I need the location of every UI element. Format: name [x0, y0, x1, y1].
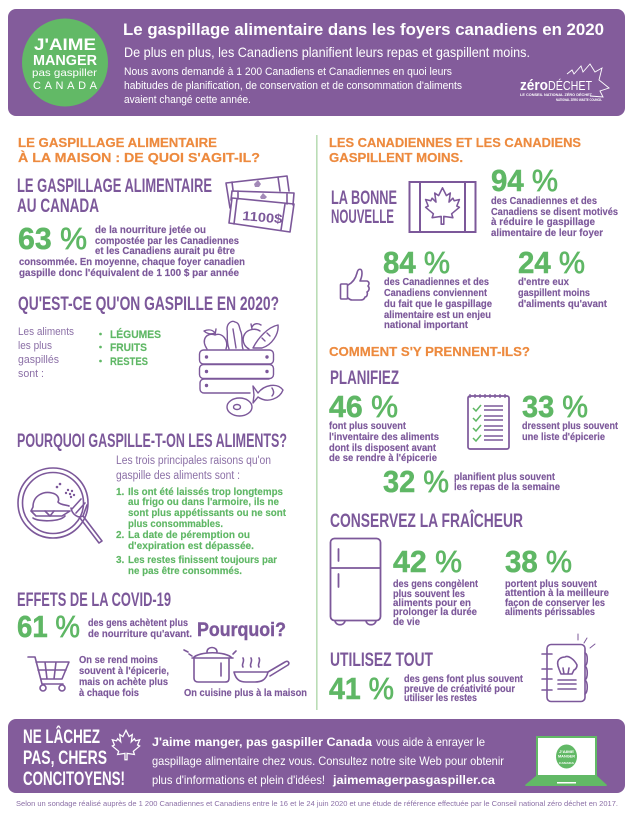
- list: three main reasons: [116, 487, 287, 577]
- stat: 84 %: 84 %: [383, 245, 450, 280]
- logo: zéro déchet: DÉCHET: [548, 78, 592, 93]
- stat: 33 %: [522, 389, 619, 443]
- footer message: vous aide à enrayer le: [376, 735, 485, 749]
- stat: 84 %: national important: [384, 320, 469, 331]
- stat: 84 %: alimentaire est un enjeu: [384, 310, 491, 321]
- stat: 24 %: d'entre eux: [518, 277, 569, 288]
- icon: pot and pan: [184, 648, 289, 682]
- heading: pourquoi gaspille-t-on: POURQUOI GASPILLE-T-ON LES ALIMENTS?: [17, 431, 287, 452]
- stat text: 63 %: [19, 225, 245, 279]
- text: les trois principales raisons: Les trois principales raisons qu'on: [116, 455, 271, 467]
- footer slogan: NE LÂCHEZ: [23, 726, 100, 748]
- icon: banknotes 1 100 $: 1100$: [242, 208, 284, 227]
- icon: laptop with logo: CANADA: [559, 761, 575, 765]
- footer slogan: [23, 726, 125, 790]
- footer message: jaimemagerpasgaspiller.ca: [332, 773, 495, 787]
- left column heading: À LA MAISON : DE QUOI S'AGIT-IL?: [18, 150, 260, 165]
- heading: le gaspillage alimentaire au Canada: AU CANADA: [17, 196, 99, 217]
- text: on se rend moins souvent: On se rend moins: [79, 655, 158, 666]
- logo: J'aime manger pas gaspiller Canada: [22, 18, 108, 106]
- stat text: 63 %: consommée. En moyenne, chaque foyer canadien: [19, 257, 245, 268]
- intro paragraph: avaient changé cette année.: [124, 94, 251, 106]
- heading: qu'est-ce qu'on gaspille: QU'EST-CE QU'ON GASPILLE EN 2020?: [18, 294, 279, 315]
- text: les trois principales raisons: [116, 455, 271, 482]
- heading: la bonne nouvelle: NOUVELLE: [331, 207, 394, 228]
- icon: thumbs up: [340, 269, 369, 300]
- stat: 46 %: dont ils disposent avant: [329, 443, 437, 454]
- subtitle: De plus en plus, les Canadiens planifient leurs repas et gaspillent moins.: [124, 44, 530, 60]
- left column heading: LE GASPILLAGE ALIMENTAIRE: [18, 135, 217, 150]
- logo: zéro déchet: [520, 64, 609, 102]
- heading: la bonne nouvelle: [331, 188, 397, 228]
- stat text: 63 %: de la nourriture jetée ou: [95, 225, 206, 236]
- text: on se rend moins souvent: souvent à l'épicerie,: [79, 666, 169, 677]
- stat: 94 %: alimentaire de leur foyer: [491, 228, 603, 239]
- stat: 63 %: [18, 221, 245, 279]
- heading: planifiez: PLANIFIEZ: [330, 368, 399, 389]
- stat: 84 %: Canadiens conviennent: [384, 288, 488, 299]
- stat: 38 %: façon de conserver les: [505, 598, 605, 609]
- list: légumes fruits restes: FRUITS: [110, 342, 147, 354]
- stat: 41 %: [329, 671, 524, 706]
- heading: utilisez tout: UTILISEZ TOUT: [330, 650, 433, 671]
- stat: 24 %: 24 %: [518, 245, 585, 280]
- text: les aliments les plus gaspillés: gaspillés: [18, 354, 59, 366]
- list: légumes fruits restes: RESTES: [110, 356, 148, 368]
- logo: J'aime manger pas gaspiller Canada: MANGER: [33, 52, 97, 69]
- text: les aliments les plus gaspillés: les plus: [18, 340, 52, 352]
- stat: 46 %: 46 %: [329, 389, 398, 424]
- icon: laptop with logo: MANGER: [558, 754, 575, 758]
- text: les trois principales raisons: gaspille des aliments sont :: [116, 470, 240, 482]
- stat text: 63 %: gaspille donc l'équivalent de 1 100 $ par année: [19, 268, 239, 279]
- stat: 32 %: 32 %: [383, 464, 449, 499]
- right column heading: GASPILLENT MOINS.: [329, 150, 463, 165]
- stat text: 63 %: et les Canadiens aurait pu être: [95, 246, 235, 257]
- heading: effets de la covid-19: EFFETS DE LA COVID-19: [17, 590, 171, 611]
- icon: fridge: [330, 538, 380, 625]
- footer message: J'aime manger, pas gaspiller Canada: [152, 735, 372, 749]
- stat: 32 %: les repas de la semaine: [454, 482, 560, 493]
- footer message: plus d'informations et plein d'idées!: [152, 773, 325, 787]
- icon: shopping cart: [28, 657, 69, 691]
- stat: 32 %: [383, 464, 560, 499]
- list: légumes fruits restes: [99, 328, 161, 368]
- heading: le gaspillage alimentaire au Canada: [17, 176, 212, 217]
- text: on cuisine plus à la maison: On cuisine plus à la maison: [184, 688, 307, 699]
- stat: 84 %: du fait que le gaspillage: [384, 299, 492, 310]
- intro paragraph: Nous avons demandé à 1 200 Canadiens et Canadiennes en quoi leurs: [124, 66, 452, 78]
- text: on se rend moins souvent: [79, 655, 169, 699]
- right column heading: [329, 135, 581, 165]
- footer slogan: PAS, CHERS: [23, 748, 107, 769]
- stat: 46 %: [329, 389, 439, 464]
- stat: 33 %: une liste d'épicerie: [522, 432, 605, 443]
- stat: 46 %: l'inventaire des aliments: [329, 432, 439, 443]
- stat: 41 %: des gens font plus souvent: [404, 674, 524, 685]
- logo: zéro déchet: NATIONAL ZERO WASTE COUNCIL: [556, 98, 602, 102]
- list: three main reasons: plus consommables.: [128, 519, 223, 530]
- stat: 61 %: [17, 609, 192, 644]
- icon: crate of food: [200, 321, 283, 416]
- heading: comment s'y prennent-ils: COMMENT S'Y PRENNENT-ILS?: [329, 344, 530, 359]
- stat: 46 %: font plus souvent: [329, 421, 407, 432]
- stat: 94 %: à réduire le gaspillage: [491, 217, 595, 228]
- stat: 84 %: des Canadiennes et des: [384, 277, 489, 288]
- heading: conservez la fraîcheur: CONSERVEZ LA FRAÎCHEUR: [330, 510, 523, 532]
- list: three main reasons: Les restes finissent toujours par: [128, 555, 277, 566]
- stat: 63 %: 63 %: [18, 221, 87, 256]
- left column heading: [18, 135, 260, 165]
- stat: 33 %: dressent plus souvent: [522, 421, 619, 432]
- stat: 38 %: aliments périssables: [505, 607, 595, 618]
- stat: 42 %: plus souvent les: [393, 589, 465, 600]
- icon: canadian flag: [410, 182, 476, 232]
- list: three main reasons: 1.: [116, 487, 125, 498]
- logo: zéro déchet: LE CONSEIL NATIONAL ZÉRO DÉCHET: [520, 92, 593, 97]
- title: Le gaspillage alimentaire dans les foyers canadiens en 2020: [123, 20, 604, 39]
- header banner: [8, 9, 625, 116]
- stat text: 63 %: compostée par les Canadiennes: [95, 236, 239, 247]
- icon: plate with burger and fork: [18, 468, 102, 543]
- stat: 61 %: des gens achètent plus: [88, 618, 188, 629]
- stat: 42 %: [393, 544, 479, 628]
- right column heading: LES CANADIENNES ET LES CANADIENS: [329, 135, 581, 150]
- list: three main reasons: d'expiration est dépassée.: [128, 541, 254, 552]
- list: légumes fruits restes: LÉGUMES: [110, 328, 161, 341]
- stat: 24 %: [518, 245, 608, 310]
- text: les aliments les plus gaspillés: sont :: [18, 368, 44, 380]
- icon: banknotes 1 100 $: [226, 176, 294, 232]
- stat: 94 %: Canadiens se disent motivés: [491, 207, 618, 218]
- heading: la bonne nouvelle: LA BONNE: [331, 188, 397, 209]
- stat: 84 %: [383, 245, 492, 331]
- icon: laptop with logo: [525, 737, 607, 786]
- logo: zéro déchet: zéro: [520, 77, 548, 94]
- text: les aliments les plus gaspillés: Les aliments: [18, 326, 74, 338]
- footer slogan: CONCITOYENS!: [23, 769, 125, 790]
- stat: 42 %: de vie: [393, 617, 420, 628]
- stat: 42 %: des gens congèlent: [393, 579, 479, 590]
- stat: 61 %: 61 %: [17, 609, 80, 644]
- stat: 38 %: [505, 544, 609, 618]
- stat: 38 %: 38 %: [505, 544, 572, 579]
- list: three main reasons: La date de péremption ou: [128, 530, 250, 541]
- list: three main reasons: ne pas être consommés.: [128, 566, 242, 577]
- logo: J'aime manger pas gaspiller Canada: pas gaspiller: [32, 67, 98, 79]
- intro paragraph: habitudes de planification, de conservation et de consommation d'aliments: [124, 80, 462, 92]
- footer message: [152, 735, 504, 787]
- intro paragraph: [124, 66, 462, 106]
- stat: 94 %: 94 %: [491, 163, 558, 198]
- icon: checklist: [468, 394, 509, 449]
- stat: 38 %: portent plus souvent: [505, 579, 598, 590]
- stat: 94 %: [491, 163, 618, 239]
- stat: 24 %: gaspillent moins: [518, 288, 590, 299]
- footer message: gaspillage alimentaire chez vous. Consultez notre site Web pour obtenir: [152, 754, 504, 768]
- stat: 38 %: attention à la meilleure: [505, 588, 609, 599]
- text: les aliments les plus gaspillés: [18, 326, 74, 380]
- list: three main reasons: 2.: [116, 530, 125, 541]
- list: three main reasons: 3.: [116, 555, 125, 566]
- stat: 24 %: d'aliments qu'avant: [518, 299, 608, 310]
- icon: recipe book: [542, 634, 595, 702]
- footnote: Selon un sondage réalisé auprès de 1 200 Canadiennes et Canadiens entre le 16 et le 24 juin 2020 et une étude de référence effectuée par le Conseil national zéro déchet en 2017.: [16, 799, 618, 808]
- text: on se rend moins souvent: à chaque fois: [79, 688, 139, 699]
- stat: 46 %: de se rendre à l'épicerie: [329, 453, 437, 464]
- list: three main reasons: au frigo ou dans l'armoire, ils ne: [128, 497, 279, 508]
- list: three main reasons: Ils ont été laissés trop longtemps: [128, 487, 283, 498]
- stat: 41 %: 41 %: [329, 671, 394, 706]
- heading: le gaspillage alimentaire au Canada: LE GASPILLAGE ALIMENTAIRE: [17, 176, 212, 197]
- stat: 94 %: des Canadiennes et des: [491, 196, 597, 207]
- callout: pourquoi?: Pourquoi?: [197, 620, 286, 641]
- icon: laptop with logo: J'AIME: [559, 749, 574, 754]
- stat: 41 %: utiliser les restes: [404, 693, 477, 704]
- stat: 42 %: prolonger la durée: [393, 607, 477, 618]
- footer banner: [8, 719, 625, 793]
- logo: J'aime manger pas gaspiller Canada: J'AIME: [34, 35, 96, 54]
- list: three main reasons: sont plus appétissants ou ne sont: [128, 508, 287, 519]
- stat: 42 %: aliments pour en: [393, 598, 471, 609]
- logo: J'aime manger pas gaspiller Canada: CANADA: [33, 80, 98, 92]
- text: on se rend moins souvent: mais on achète plus: [79, 677, 168, 688]
- icon: maple leaf: [112, 730, 140, 760]
- stat: 33 %: 33 %: [522, 389, 588, 424]
- stat: 41 %: preuve de créativité pour: [404, 684, 515, 695]
- stat: 61 %: de nourriture qu'avant.: [88, 629, 192, 640]
- stat: 42 %: 42 %: [393, 544, 462, 579]
- stat: 32 %: planifient plus souvent: [454, 472, 556, 483]
